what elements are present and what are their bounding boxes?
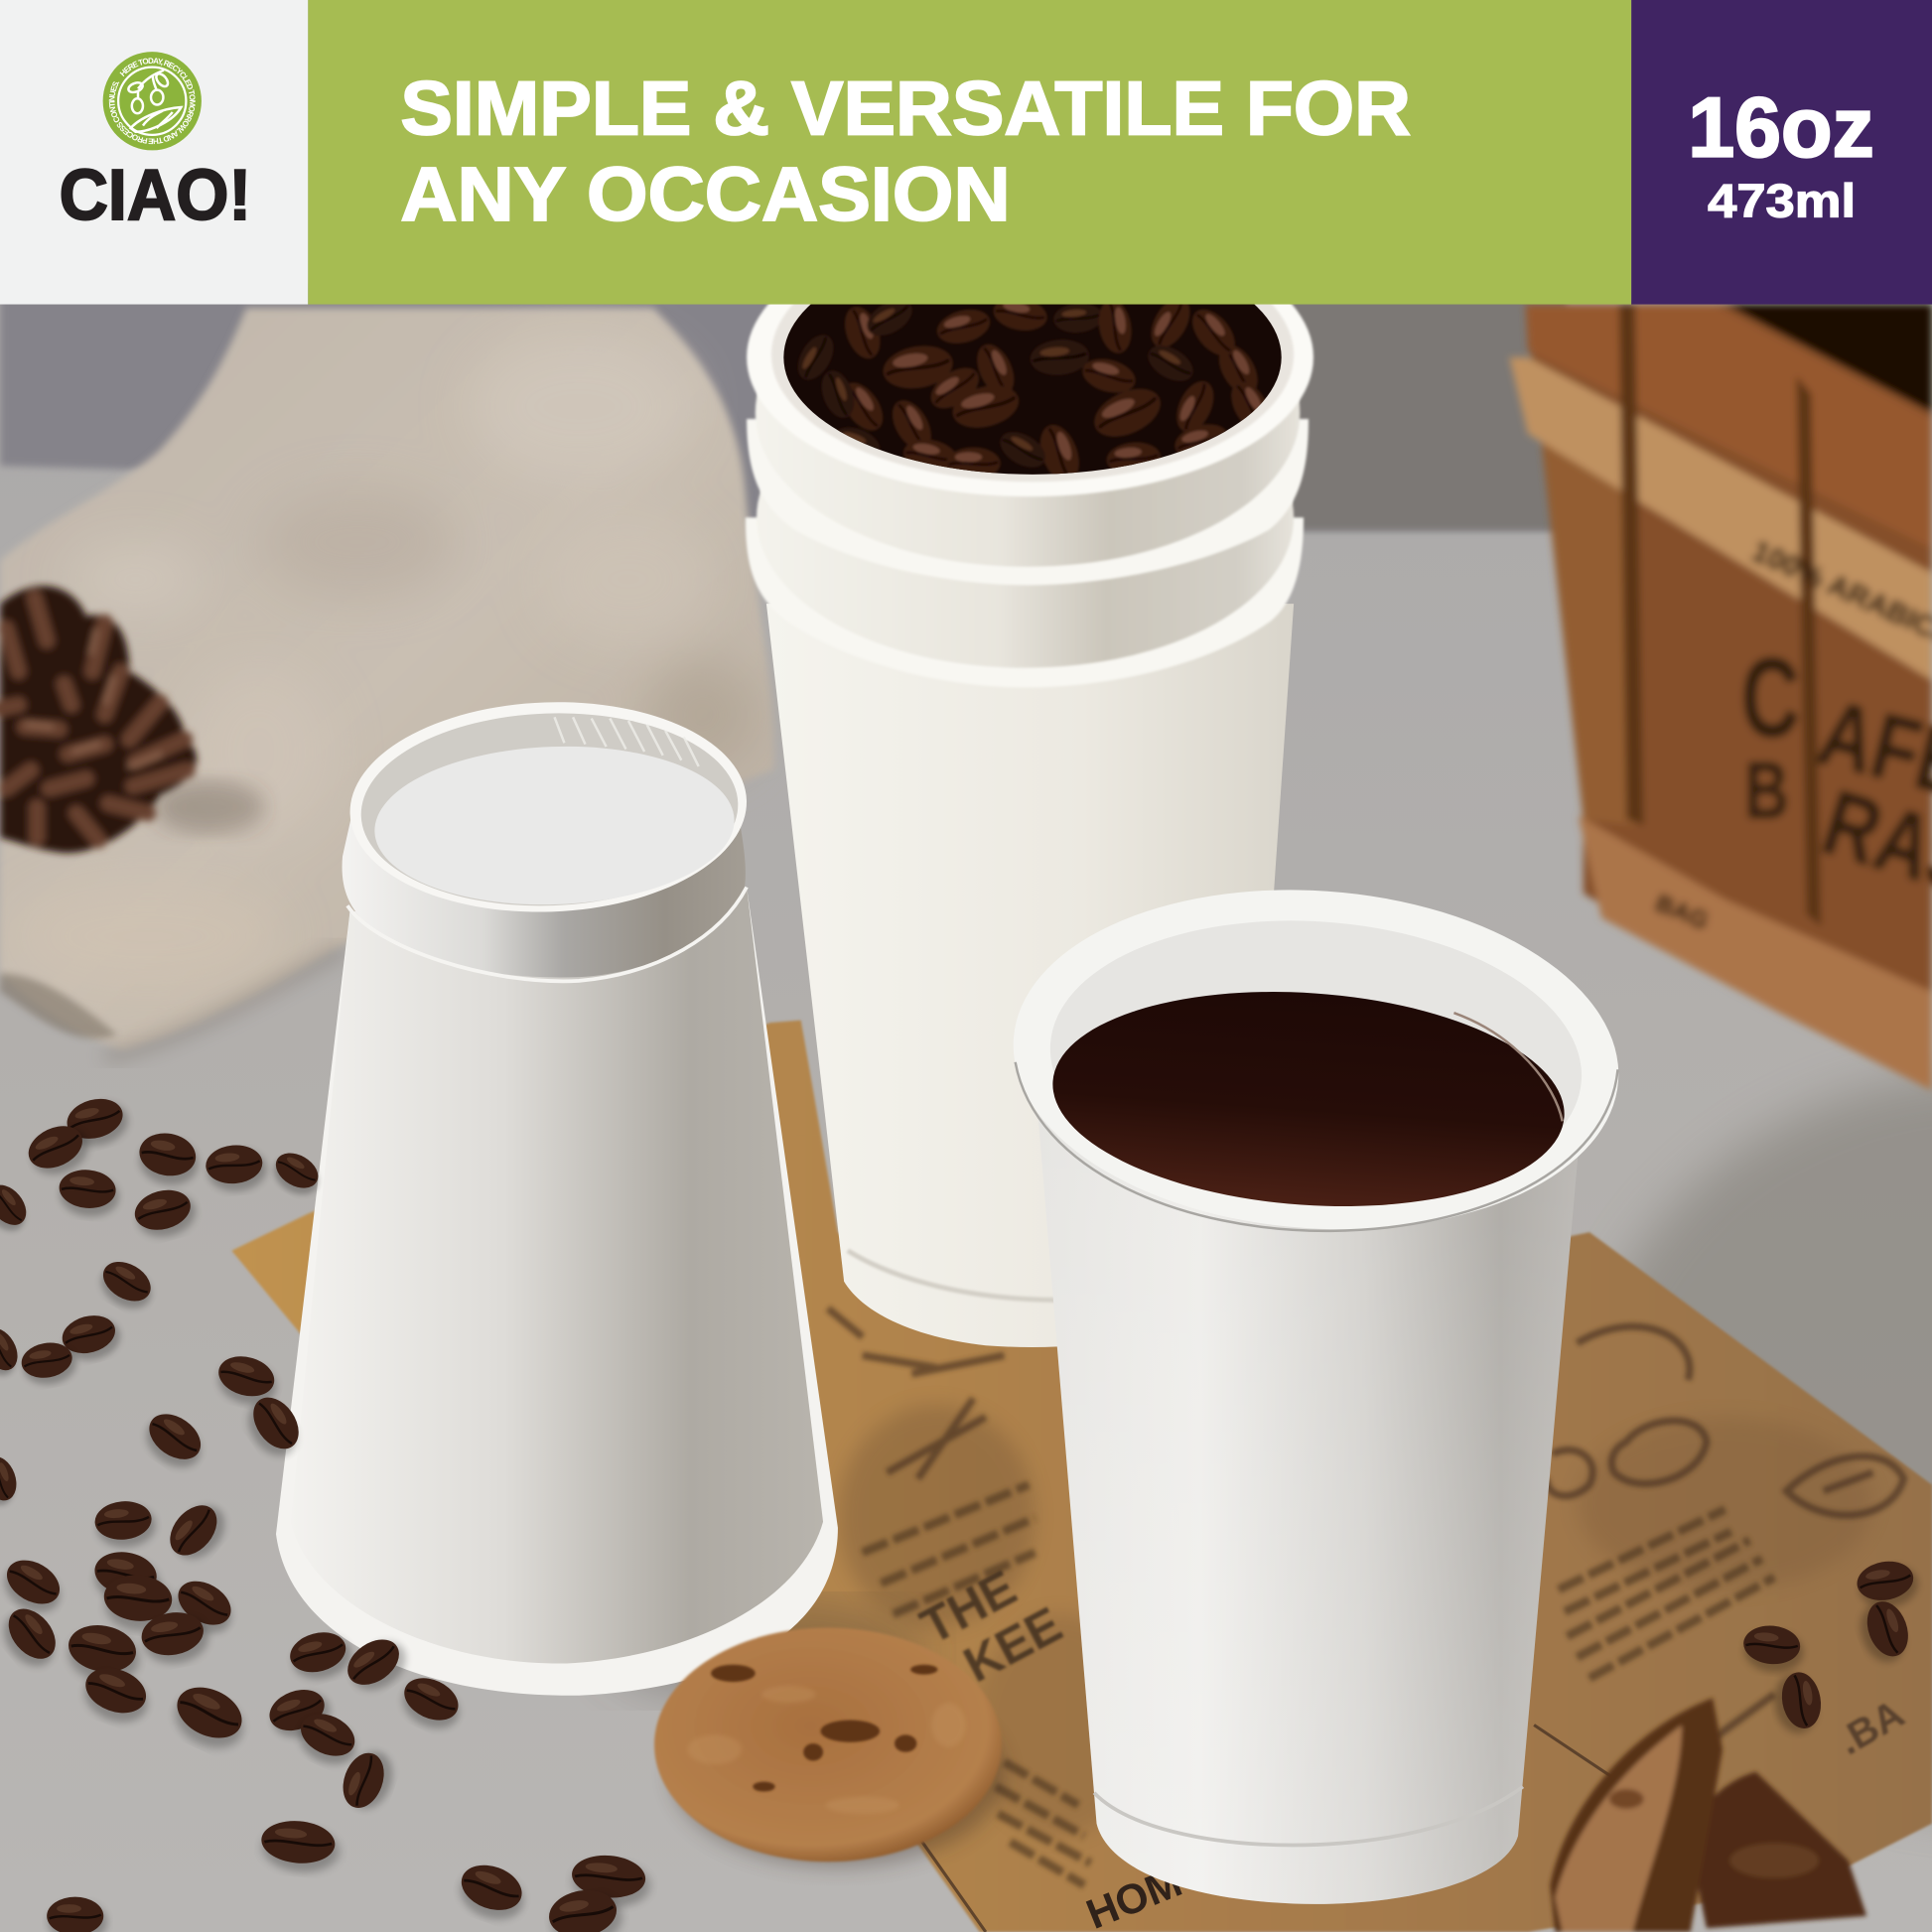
crate lettering — [1651, 534, 1932, 935]
shadow under inverted cup — [604, 1601, 924, 1701]
inverted cup with lid — [276, 696, 838, 1696]
title panel — [308, 0, 1631, 305]
icon: recycled seal: HERE TODAY, RECYCLED TOMORROW. AND THE PROCESS CONTINUES. — [109, 58, 196, 145]
crate lettering: BAG — [1651, 890, 1713, 935]
size text — [1688, 80, 1874, 226]
burlap cloth — [0, 308, 774, 1057]
pinecone — [0, 586, 265, 853]
crate lettering: C — [1741, 635, 1800, 761]
header band — [0, 0, 1932, 305]
lid band — [343, 801, 746, 977]
newspaper illustrations and lines — [828, 1309, 1903, 1737]
paper text: THE — [911, 1560, 1025, 1655]
front cup with coffee — [1002, 870, 1630, 1904]
size text: 473ml — [1708, 174, 1856, 226]
logo wordmark: CIAO! — [60, 156, 251, 235]
title text: ANY OCCASION — [400, 152, 1011, 237]
scattered coffee beans — [0, 1092, 1921, 1932]
burlap mottling — [12, 333, 758, 992]
kraft paper mat: KEE — [955, 1596, 1070, 1693]
logo panel — [0, 0, 308, 305]
kraft paper mat: .BA — [1831, 1692, 1911, 1763]
wooden crate — [1509, 305, 1932, 1090]
size text: 16oz — [1688, 80, 1874, 176]
crate lettering: B — [1744, 746, 1789, 836]
size panel — [1631, 0, 1932, 305]
coffee beans in top cup — [770, 304, 1295, 483]
cookie — [654, 1627, 1004, 1866]
title text — [400, 66, 1411, 237]
broken cookie pieces — [1550, 1698, 1866, 1932]
kraft paper mat — [231, 1021, 1932, 1932]
stacked cups — [746, 218, 1313, 1347]
title text: SIMPLE & VERSATILE FOR — [400, 66, 1411, 151]
